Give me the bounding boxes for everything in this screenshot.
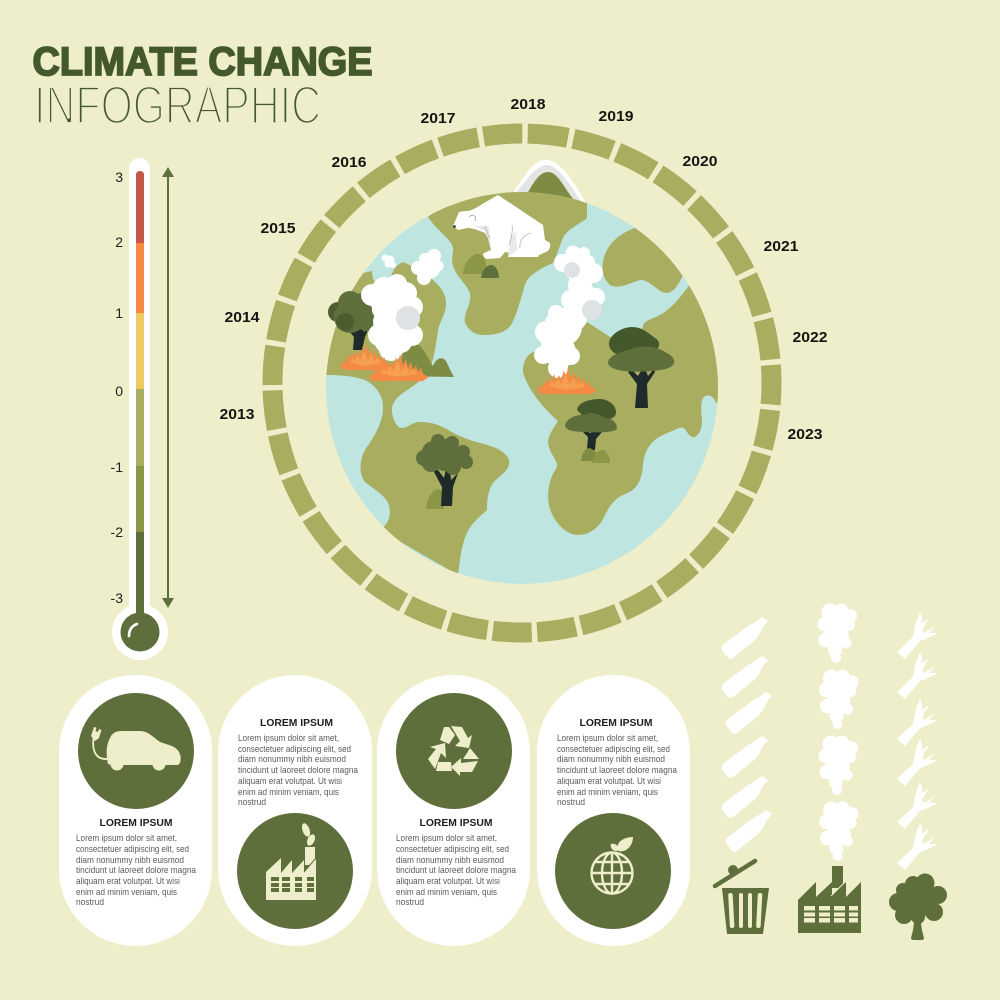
text: lorem ipsum: Lorem ipsum dolor sit amet, (557, 733, 658, 743)
text: lorem ipsum: tincidunt ut laoreet dolore magna (557, 765, 677, 775)
icon: tree (889, 874, 947, 940)
text: lorem ipsum: consectetuer adipiscing elit, sed (238, 744, 351, 754)
mountain behind globe (513, 160, 588, 206)
text: lorem ipsum (396, 817, 516, 907)
text: lorem ipsum: aliquam erat volutpat. Ut wisi (76, 876, 180, 886)
year labels: 2020 (682, 153, 718, 170)
year labels: 2018 (510, 96, 546, 113)
icon: factory (798, 866, 861, 933)
bushes under bear (463, 254, 499, 278)
timeline ring (256, 117, 788, 649)
text: lorem ipsum: tincidunt ut laoreet dolore magna (238, 765, 358, 775)
text: lorem ipsum (76, 817, 196, 907)
text: lorem ipsum: nostrud (557, 797, 585, 807)
thermometer scale labels (111, 169, 123, 606)
text: lorem ipsum: enim ad minim veniam, quis (557, 787, 658, 797)
title: CLIMATE CHANGE (32, 40, 372, 84)
land: eastern continent (523, 280, 730, 535)
year labels: 2015 (260, 220, 296, 237)
land: western and southern continent (320, 262, 509, 575)
text: lorem ipsum: diam nonummy nibh euismod (557, 754, 665, 764)
hills near fire (400, 345, 454, 377)
text: lorem ipsum: LOREM IPSUM (580, 717, 653, 729)
text: lorem ipsum: nostrud (396, 897, 424, 907)
smoke column (818, 604, 858, 861)
year labels: 2017 (420, 110, 456, 127)
smoke: west (361, 249, 444, 361)
text: lorem ipsum: Lorem ipsum dolor sit amet, (396, 833, 497, 843)
tree: north-east (608, 327, 674, 408)
polar bear (453, 195, 550, 259)
text: lorem ipsum: nostrud (238, 797, 266, 807)
tree: south (416, 434, 473, 509)
land: north-east continent (602, 228, 683, 293)
text: lorem ipsum (557, 717, 677, 807)
text: lorem ipsum: aliquam erat volutpat. Ut wisi (557, 776, 661, 786)
thermometer scale labels: 0 (115, 383, 123, 399)
icon: trash can (715, 861, 769, 934)
wildfire: west (340, 343, 429, 381)
year labels: 2013 (220, 406, 254, 423)
thermometer scale labels: -1 (111, 459, 123, 475)
tree: south-east (565, 399, 617, 463)
panel: green globe (537, 675, 690, 946)
text: lorem ipsum: tincidunt ut laoreet dolore magna (76, 865, 196, 875)
text: lorem ipsum: enim ad minim veniam, quis (238, 787, 339, 797)
year labels: 2023 (788, 426, 822, 443)
year labels: 2019 (598, 108, 634, 125)
year labels: 2022 (792, 329, 828, 346)
year labels: 2014 (224, 309, 260, 326)
text: lorem ipsum: LOREM IPSUM (420, 817, 493, 829)
text: lorem ipsum: diam nonummy nibh euismod (76, 855, 184, 865)
title: INFOGRAPHIC (34, 76, 321, 136)
thermometer scale labels: -2 (111, 524, 123, 540)
text: lorem ipsum: LOREM IPSUM (260, 717, 333, 729)
text: lorem ipsum: consectetuer adipiscing elit, sed (76, 844, 189, 854)
branches column (897, 612, 938, 870)
icon: electric car (91, 727, 181, 770)
thermometer scale labels: 1 (115, 305, 123, 321)
text: lorem ipsum: nostrud (76, 897, 104, 907)
text: lorem ipsum: Lorem ipsum dolor sit amet, (238, 733, 339, 743)
text: lorem ipsum: diam nonummy nibh euismod (396, 855, 504, 865)
text: lorem ipsum: enim ad minim veniam, quis (396, 887, 497, 897)
text: lorem ipsum: diam nonummy nibh euismod (238, 754, 346, 764)
year labels (220, 96, 828, 443)
thermometer scale labels: 2 (115, 234, 123, 250)
text: lorem ipsum: tincidunt ut laoreet dolore magna (396, 865, 516, 875)
smoke: east (534, 246, 605, 378)
thermometer scale labels: -3 (111, 590, 123, 606)
icon: recycle symbol (428, 726, 479, 776)
thermometer scale labels: 3 (115, 169, 123, 185)
panel: green factory (218, 675, 372, 946)
globe (320, 188, 730, 584)
year labels: 2021 (764, 238, 798, 255)
wildfire: east (537, 367, 597, 394)
land: north continent (428, 188, 587, 335)
thermometer (112, 158, 168, 660)
tree: west (328, 291, 377, 350)
panel: recycling (377, 675, 530, 946)
text: lorem ipsum: enim ad minim veniam, quis (76, 887, 177, 897)
year labels: 2016 (332, 154, 366, 171)
text: lorem ipsum: consectetuer adipiscing elit, sed (557, 744, 670, 754)
text: lorem ipsum: consectetuer adipiscing elit, sed (396, 844, 509, 854)
panel: electric car (59, 675, 212, 946)
title (32, 40, 372, 136)
text: lorem ipsum (238, 717, 358, 807)
arrow: temperature range (162, 167, 174, 608)
text: lorem ipsum: aliquam erat volutpat. Ut wisi (238, 776, 342, 786)
text: lorem ipsum: Lorem ipsum dolor sit amet, (76, 833, 177, 843)
text: lorem ipsum: aliquam erat volutpat. Ut wisi (396, 876, 500, 886)
bottles column (722, 617, 772, 852)
text: lorem ipsum: LOREM IPSUM (100, 817, 173, 829)
icon: factory with leaves (266, 822, 317, 900)
icon: globe with leaves (591, 837, 633, 894)
